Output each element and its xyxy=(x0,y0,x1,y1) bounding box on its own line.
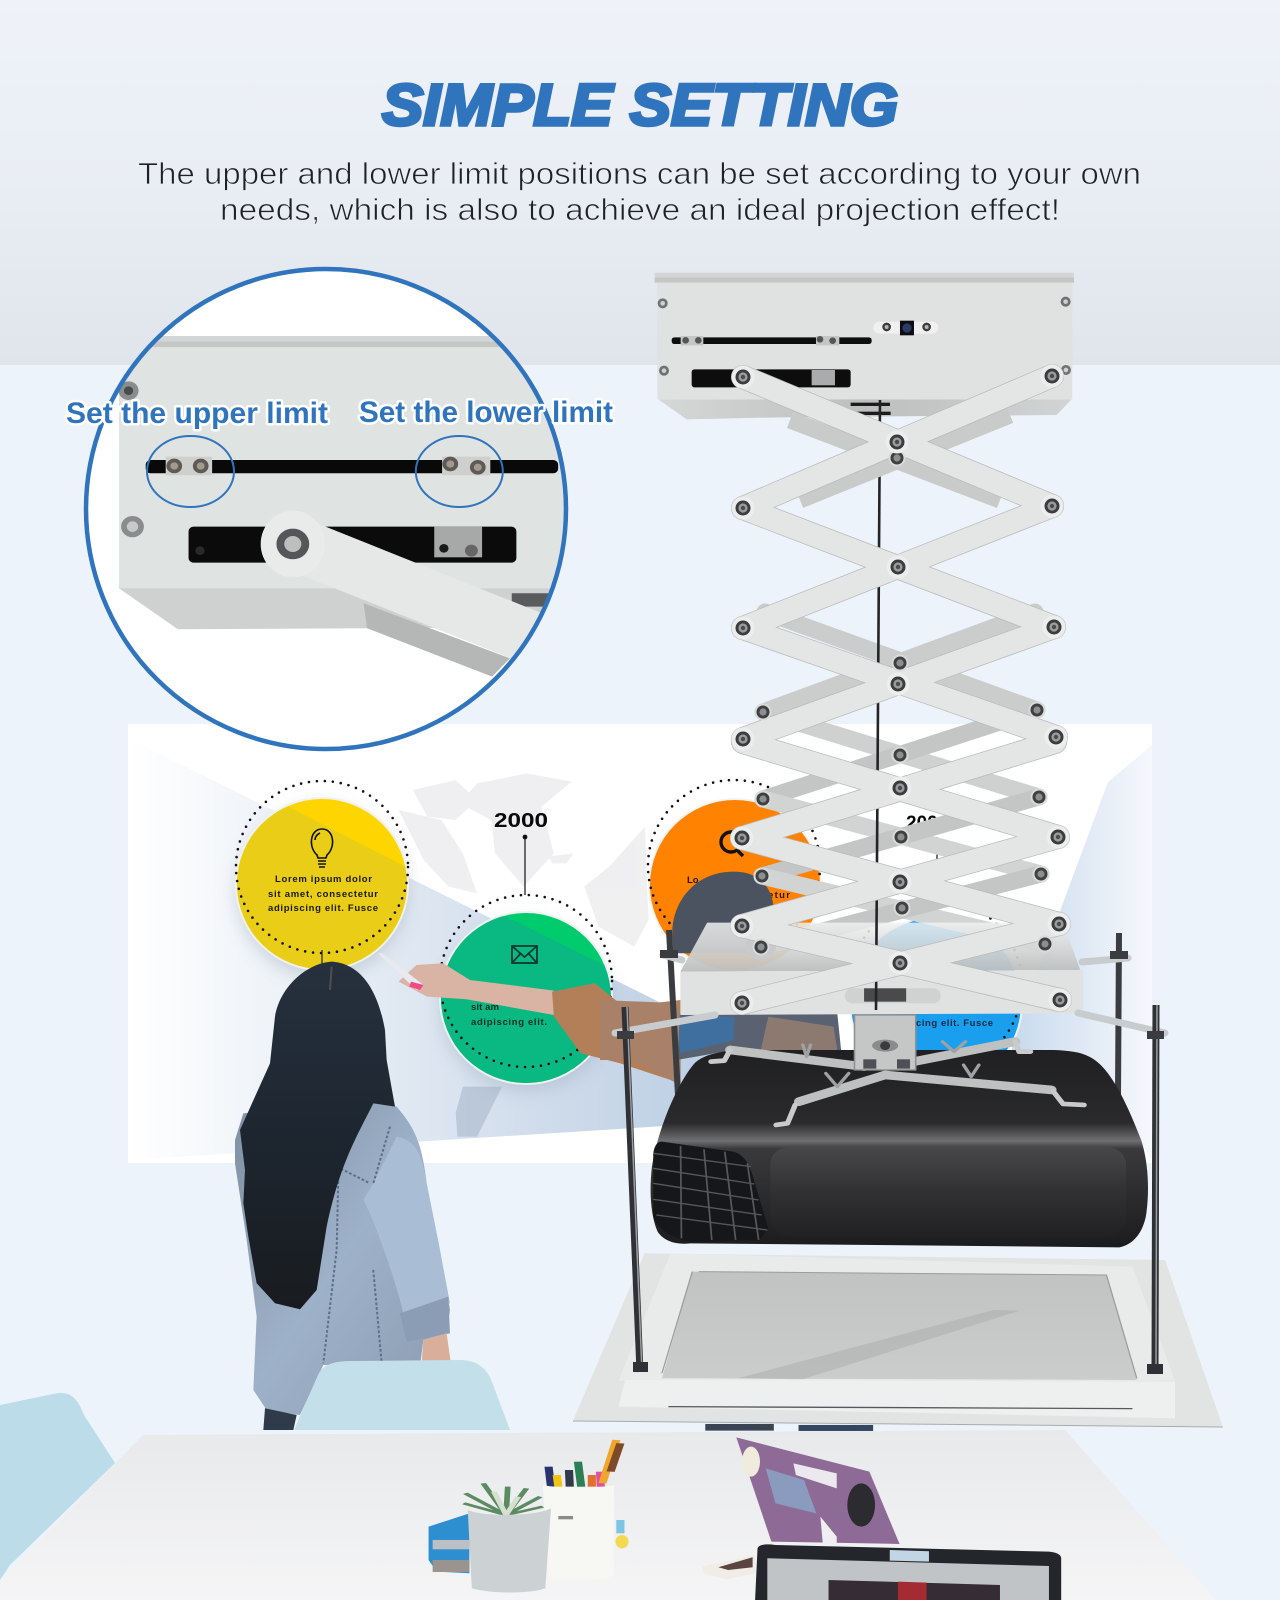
description text: needs, which is also to achieve an ideal projection effect! xyxy=(220,192,1060,227)
second woman pointing xyxy=(378,953,681,1083)
left chair xyxy=(0,1393,115,1580)
label: set the upper limit: Set the upper limit xyxy=(66,397,328,430)
lower tray xyxy=(680,923,1083,1015)
title: SIMPLE SETTING xyxy=(382,73,898,138)
light cone right xyxy=(1012,745,1152,1160)
orange circle text: Lo xyxy=(687,875,699,886)
zoom detail circle xyxy=(86,269,583,749)
projector mount spider xyxy=(711,1015,1084,1125)
enlarged arm xyxy=(364,603,510,677)
projection screen xyxy=(128,724,1152,1163)
chair in front of woman xyxy=(294,1360,510,1430)
support brackets xyxy=(615,955,1165,1033)
hand skin xyxy=(422,1333,451,1363)
icon: search xyxy=(721,832,743,856)
enlarged lower slot xyxy=(189,527,516,563)
year label partially hidden xyxy=(906,813,938,860)
label: set the lower limit: Set the lower limit xyxy=(359,396,613,429)
description text: The upper and lower limit positions can be set according to your own xyxy=(138,156,1141,191)
green circle text: adipiscing elit. xyxy=(471,1017,547,1028)
yellow circle text xyxy=(268,874,378,914)
phone xyxy=(702,1555,755,1579)
jacket seams xyxy=(323,1127,390,1363)
yellow circle xyxy=(230,780,414,980)
enlarged box xyxy=(158,336,494,342)
upper shadow arms xyxy=(790,415,1010,500)
table xyxy=(0,1430,1216,1600)
orange circle text xyxy=(687,875,790,901)
green circle text: sit am xyxy=(471,1002,499,1013)
succulent xyxy=(464,1483,543,1515)
green circle xyxy=(436,894,614,1094)
world map xyxy=(399,773,649,1137)
light cone left xyxy=(128,738,760,1160)
scissor lift bolts xyxy=(730,364,1072,1014)
arm xyxy=(399,963,554,1015)
top mounting box xyxy=(655,273,1074,419)
back threaded rods xyxy=(669,930,1119,1095)
pens xyxy=(549,1440,620,1487)
wing nuts xyxy=(803,1042,979,1087)
orange circle text: etur xyxy=(768,890,790,901)
projector xyxy=(651,1050,1148,1247)
yellow circle text: adipiscing elit. Fusce xyxy=(268,903,378,914)
year label partially hidden: 200 xyxy=(906,813,938,834)
blue circle xyxy=(849,899,1023,1090)
grey plant pot xyxy=(468,1508,551,1593)
yellow object xyxy=(615,1535,629,1548)
trousers xyxy=(263,1408,297,1430)
denim jacket xyxy=(235,1100,450,1415)
second woman head and torso xyxy=(600,872,841,1083)
yellow circle text: sit amet, consectetur xyxy=(268,889,378,900)
year label 2000: 2000 xyxy=(494,810,548,832)
mount bracket xyxy=(854,1015,916,1070)
blue circle text: cing elit. Fusce xyxy=(916,1018,993,1029)
front threaded rods xyxy=(617,950,1164,1374)
yellow circle text: Lorem ipsum dolor xyxy=(275,874,372,885)
year label 2000 xyxy=(494,810,548,895)
ceiling plate xyxy=(573,1253,1223,1431)
icon: light bulb xyxy=(311,829,333,867)
desk objects xyxy=(429,1437,1061,1600)
hair xyxy=(240,962,395,1309)
white pen cup xyxy=(543,1485,614,1580)
jacket sleeve xyxy=(363,1137,450,1313)
sleeve xyxy=(552,983,681,1083)
description text xyxy=(138,156,1141,227)
blue box xyxy=(429,1513,469,1573)
first woman from behind xyxy=(235,962,451,1430)
icon: envelope xyxy=(512,946,537,963)
scissor lift front arms xyxy=(742,376,1060,1003)
orange circle xyxy=(648,780,822,972)
enlarged edge screws xyxy=(121,516,144,537)
vent grille xyxy=(653,1142,768,1242)
enlarged slot xyxy=(146,460,558,473)
vertical cable xyxy=(876,400,880,1010)
limit markers xyxy=(147,436,503,507)
purple laptop xyxy=(736,1437,900,1544)
scissor lift back layer xyxy=(761,612,1045,947)
green circle text xyxy=(471,1002,547,1028)
pen xyxy=(378,953,424,990)
front laptop xyxy=(755,1544,1061,1600)
